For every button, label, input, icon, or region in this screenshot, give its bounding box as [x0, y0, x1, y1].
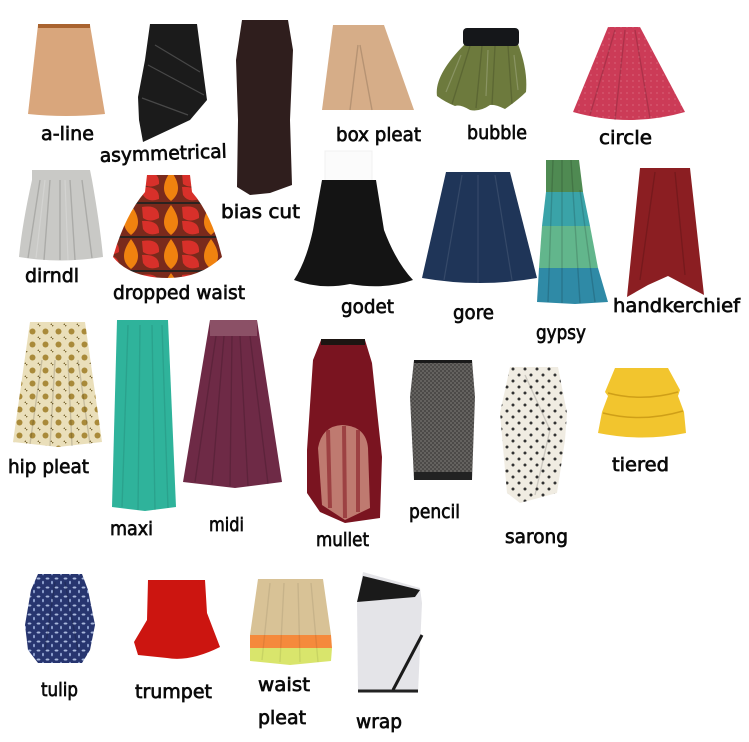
label: asymmetrical: asymmetrical	[99, 141, 227, 167]
skirt: bias cut	[221, 20, 300, 223]
skirt: gypsy	[536, 160, 608, 344]
skirt: dropped waist	[113, 175, 245, 304]
label: midi: midi	[209, 514, 244, 536]
label: tulip: tulip	[41, 679, 78, 701]
label: hip pleat: hip pleat	[8, 456, 89, 478]
label: dropped waist: dropped waist	[113, 282, 245, 304]
skirt: waist pleat	[250, 579, 332, 729]
label: gypsy: gypsy	[536, 322, 586, 344]
label: wrap: wrap	[356, 711, 402, 733]
skirt: dirndl	[19, 170, 103, 287]
label: godet: godet	[341, 296, 394, 318]
skirt: asymmetrical	[99, 24, 227, 167]
skirt: bubble	[437, 28, 527, 144]
skirt: trumpet	[134, 580, 220, 703]
skirt: godet	[294, 151, 413, 318]
skirt: gore	[422, 172, 537, 324]
skirt: mullet	[307, 339, 382, 551]
label: mullet: mullet	[316, 529, 369, 551]
skirt: box pleat	[322, 25, 421, 146]
skirt: tiered	[598, 368, 686, 476]
skirt: sarong	[500, 367, 568, 548]
label: bubble: bubble	[467, 122, 527, 144]
label: trumpet: trumpet	[135, 681, 212, 703]
label: tiered: tiered	[612, 454, 669, 476]
skirt: hip pleat	[8, 322, 102, 478]
label: circle: circle	[599, 127, 652, 149]
skirt: handkerchief	[613, 168, 741, 317]
label: maxi: maxi	[110, 518, 153, 540]
label: a-line: a-line	[41, 123, 94, 145]
label: waist pleat: waist	[258, 674, 310, 696]
skirt: circle	[573, 27, 685, 149]
label: box pleat: box pleat	[336, 124, 421, 146]
label: gore: gore	[453, 302, 494, 324]
label: bias cut: bias cut	[221, 201, 300, 223]
label: dirndl: dirndl	[25, 265, 79, 287]
label: pencil: pencil	[409, 501, 460, 523]
label: waist pleat: pleat	[258, 707, 306, 729]
skirt: tulip	[25, 574, 95, 701]
skirt: wrap	[356, 572, 422, 733]
skirt: pencil	[409, 360, 475, 523]
label: handkerchief: handkerchief	[613, 295, 741, 317]
skirt: a-line	[28, 24, 105, 145]
label: sarong: sarong	[505, 526, 568, 548]
skirt: maxi	[110, 320, 176, 540]
skirt: midi	[183, 320, 282, 536]
